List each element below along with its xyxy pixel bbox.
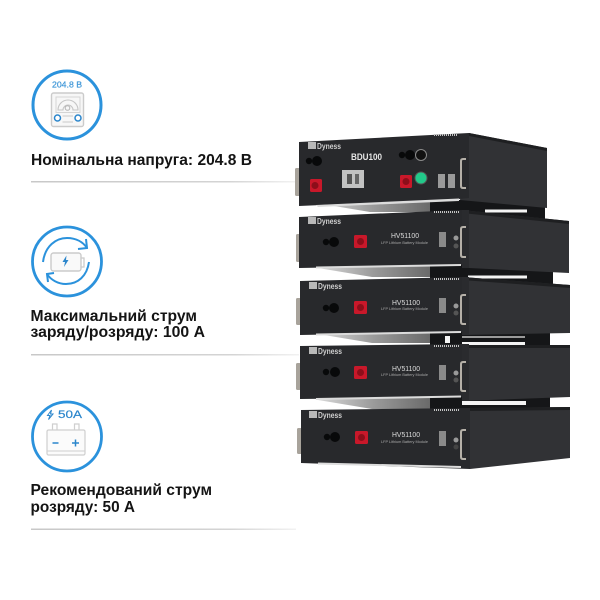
unit: HV51100 module 2: LFP Lithium Battery Module bbox=[381, 306, 429, 311]
icon: charge and discharge cycle bbox=[32, 227, 102, 296]
unit: HV51100 module 1 bbox=[296, 210, 569, 273]
icon: car battery 50 A bbox=[32, 402, 102, 471]
unit: BDU100 control module bbox=[295, 133, 547, 208]
unit: HV51100 module 4: LFP Lithium Battery Module bbox=[381, 439, 429, 444]
icon: voltmeter 204.8 V bbox=[33, 71, 101, 139]
battery stack bbox=[295, 133, 570, 469]
unit: HV51100 module 2 bbox=[296, 277, 570, 336]
unit: HV51100 module 3: Dyness bbox=[318, 347, 342, 356]
unit: BDU100 control module: Dyness bbox=[317, 142, 341, 151]
icon: voltmeter 204.8 V: 204.8 В bbox=[52, 80, 82, 90]
unit: HV51100 module 4: HV51100 bbox=[392, 430, 420, 439]
unit: HV51100 module 1: LFP Lithium Battery Module bbox=[381, 240, 429, 245]
heading: recommended discharge current bbox=[30, 482, 212, 516]
unit: HV51100 module 3 bbox=[296, 344, 570, 401]
heading: recommended discharge current: Рекомендований струм bbox=[30, 482, 212, 499]
unit: HV51100 module 2: HV51100 bbox=[392, 298, 420, 307]
unit: HV51100 module 1: HV51100 bbox=[391, 231, 419, 240]
unit: HV51100 module 3: LFP Lithium Battery Module bbox=[381, 372, 429, 377]
heading: max charge and discharge current bbox=[30, 308, 205, 341]
unit: HV51100 module 1: Dyness bbox=[317, 217, 341, 226]
unit: HV51100 module 4 bbox=[297, 407, 570, 469]
rear spacers between units bbox=[316, 200, 553, 409]
unit: HV51100 module 2: Dyness bbox=[318, 282, 342, 291]
heading: max charge and discharge current: Максимальний струм bbox=[30, 308, 197, 325]
heading: max charge and discharge current: заряду/розряду: 100 А bbox=[30, 324, 205, 341]
heading: nominal voltage: Номінальна напруга: 204.8 В bbox=[31, 152, 252, 169]
heading: recommended discharge current: розряду: 50 А bbox=[30, 499, 135, 516]
unit: HV51100 module 4: Dyness bbox=[318, 411, 342, 420]
unit: BDU100 control module: BDU100 bbox=[351, 152, 382, 163]
icon: car battery 50 A: 50A bbox=[58, 409, 83, 421]
unit: HV51100 module 3: HV51100 bbox=[392, 364, 420, 373]
